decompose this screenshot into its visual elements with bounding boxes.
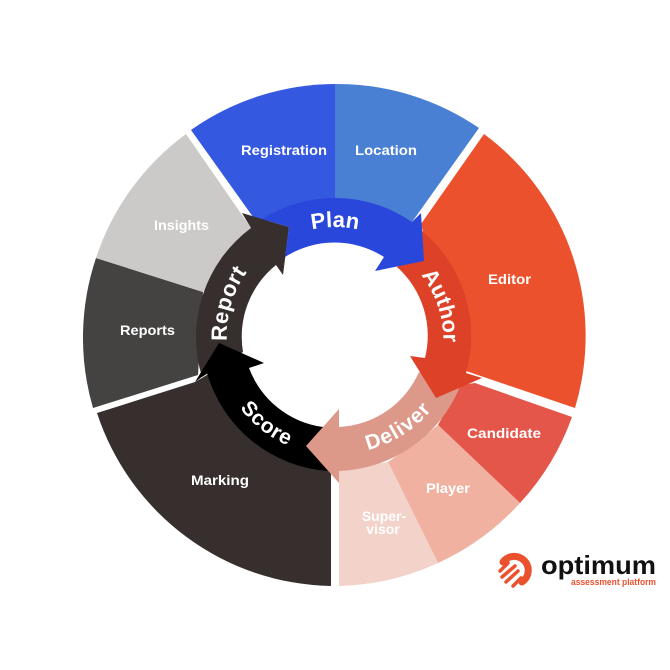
segment: Insights: Insights — [154, 217, 209, 233]
segment: Marking: Marking — [191, 472, 249, 488]
arrow: Report — [196, 213, 289, 377]
logo: optimum assessment platform — [500, 550, 656, 587]
arrow: Author — [397, 231, 482, 398]
arrow: Deliver — [306, 372, 459, 483]
segment: Supervisor — [339, 462, 438, 586]
arrow: Plan: Plan — [311, 211, 358, 230]
segment: Player: Player — [426, 480, 471, 496]
segment: Location: Location — [355, 142, 417, 158]
segment: Reports: Reports — [120, 322, 175, 338]
segment: Reports — [83, 258, 203, 408]
panel: outer ring segments — [83, 84, 586, 586]
segment: Insights — [96, 134, 251, 292]
panel: inner cycle arrows — [195, 198, 482, 483]
segment: Candidate — [438, 383, 572, 503]
arrow: Score: Score — [242, 401, 290, 444]
arrow: Plan — [262, 198, 424, 271]
segment: Registration — [191, 84, 335, 224]
segment: Editor: Editor — [488, 271, 532, 287]
segment: Supervisor: Super- — [362, 508, 407, 524]
tagline: assessment platform — [571, 577, 656, 587]
arrow: Author: Author — [422, 271, 456, 342]
label: Registration: Registration — [241, 142, 327, 158]
segment: Editor — [421, 134, 586, 408]
icon: logo mark — [500, 556, 528, 586]
segment: Player — [388, 425, 520, 563]
segment: Supervisor: visor — [366, 521, 400, 537]
segment: Marking — [97, 372, 331, 586]
segment: Location — [335, 84, 479, 222]
segment: Candidate: Candidate — [467, 425, 541, 441]
arrow: Score — [195, 343, 328, 471]
arrow: Deliver: Deliver — [364, 402, 429, 450]
arrow: Report: Report — [212, 266, 246, 340]
wordmark: optimum — [541, 550, 656, 580]
